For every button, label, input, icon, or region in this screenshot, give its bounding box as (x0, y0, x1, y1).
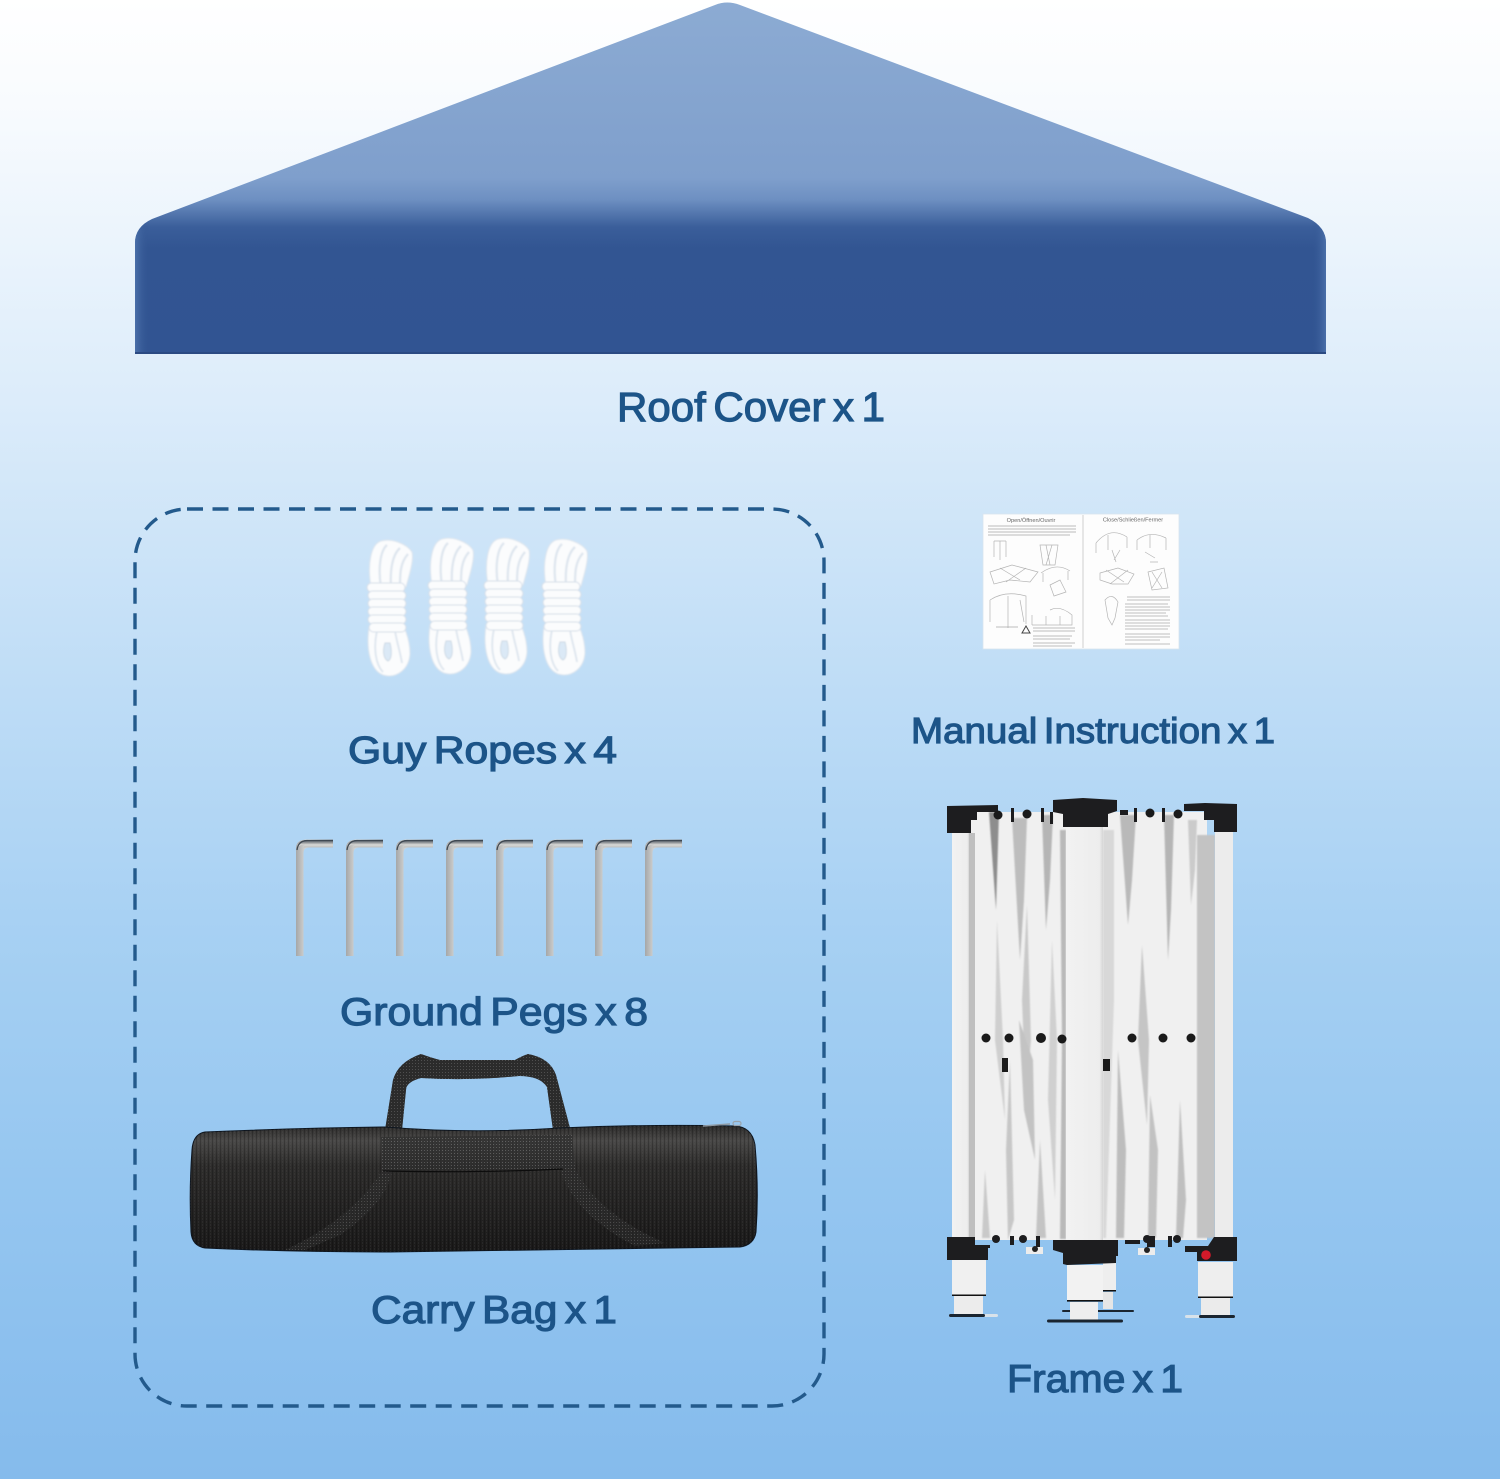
frame scissor bars (968, 812, 1207, 1240)
panel: dashed accessories box (135, 509, 824, 1406)
frame red button (1201, 1250, 1211, 1260)
icon: black carry bag (190, 1054, 757, 1252)
label: ground pegs: Ground Pegs x 8 (340, 991, 648, 1034)
frame lower clips (1026, 1246, 1155, 1255)
bag strap panel (381, 1135, 575, 1171)
manual drawings (988, 526, 1170, 646)
icon: eight ground pegs (296, 840, 682, 956)
icon: blue roof cover (135, 0, 1326, 355)
manual page (983, 514, 1179, 649)
manual titles: Open/Öffnen/Ouvrir (1007, 517, 1055, 524)
heading: roof cover label: Roof Cover x 1 (617, 384, 885, 430)
frame rear legs (1062, 1256, 1134, 1312)
label: guy ropes: Guy Ropes x 4 (348, 730, 617, 772)
label: frame: Frame x 1 (1007, 1358, 1183, 1401)
frame telescopic legs (949, 1260, 1235, 1322)
label: manual instruction: Manual Instruction x 1 (911, 710, 1275, 751)
icon: manual instruction sheet: Close/Schließen/Fermer (1103, 518, 1163, 524)
icon: white folded canopy frame (947, 798, 1237, 1322)
icon: four white guy ropes (367, 538, 588, 676)
label: carry bag: Carry Bag x 1 (371, 1289, 617, 1332)
icon: manual instruction sheet (983, 514, 1179, 649)
bag zipper pull (703, 1124, 730, 1126)
frame corner posts (952, 825, 1233, 1242)
bag handle (385, 1054, 570, 1130)
bag straps (285, 1171, 392, 1250)
frame top and middle pivots (982, 808, 1196, 1072)
bag body (190, 1125, 757, 1252)
frame bottom brackets (947, 1235, 1237, 1265)
frame top brackets (947, 798, 1237, 833)
